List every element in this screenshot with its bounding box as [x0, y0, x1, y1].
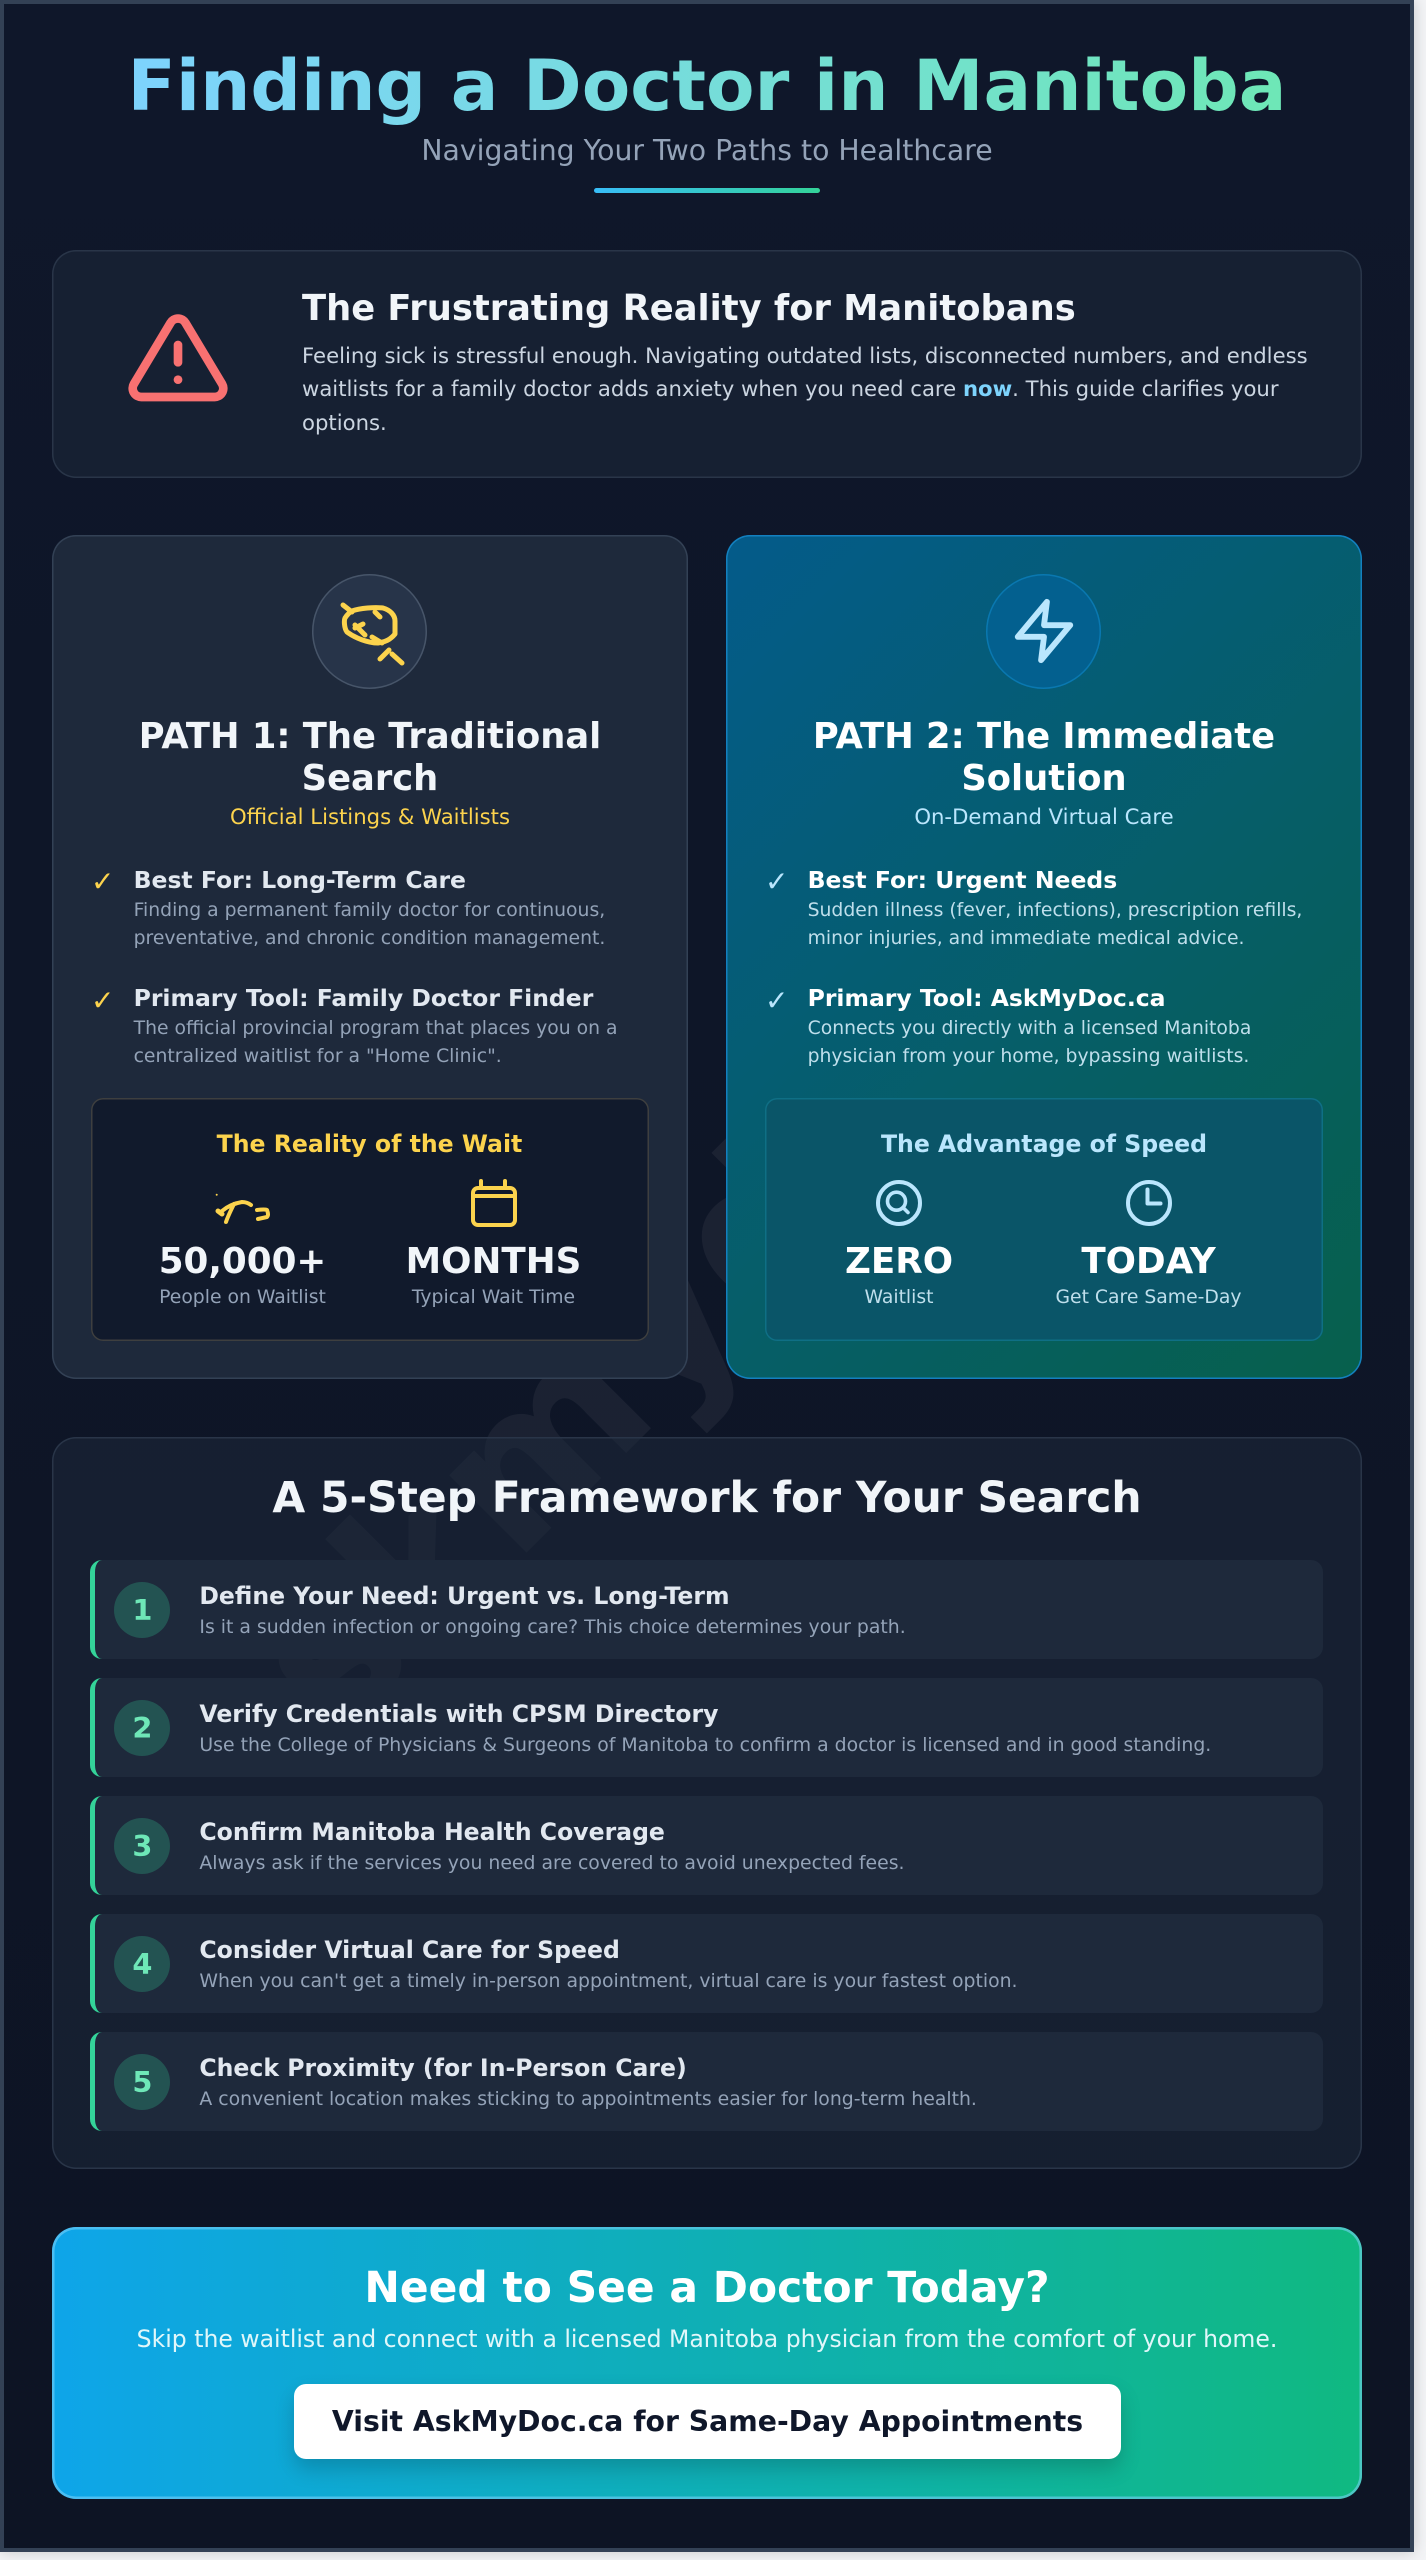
item description: Connects you directly with a licensed Manitoba [808, 1018, 1251, 1038]
cta heading: Need to See a Doctor Today? [364, 2263, 1050, 2312]
icon: check: ✓ [765, 984, 788, 1017]
header underline [594, 188, 820, 193]
item title: Best For: Urgent Needs [808, 866, 1117, 894]
step number: 2 [132, 1710, 152, 1744]
watermark: skmydoc.ca [206, 679, 1304, 1777]
callout: reality of the wait [90, 1098, 648, 1341]
list item: best for [91, 865, 605, 949]
alert text: Feeling sick is stressful enough. Navigating outdated lists, disconnected numbers, and endless [302, 343, 1308, 368]
item description: physician from your home, bypassing waitlists. [808, 1046, 1249, 1067]
icon: search circle [876, 1180, 922, 1226]
item title: Best For: Long-Term Care [134, 866, 466, 894]
icon: clock [1126, 1180, 1172, 1226]
step number: 4 [132, 1946, 152, 1980]
item description: Sudden illness (fever, infections), prescription refills, [808, 900, 1302, 921]
panel: path 1 traditional search [52, 535, 688, 1379]
stat value: TODAY [1081, 1240, 1216, 1282]
step 5 [90, 2032, 1323, 2131]
icon: check: ✓ [91, 865, 114, 898]
step 3 [90, 1796, 1323, 1895]
item description: Finding a permanent family doctor for continuous, [134, 900, 605, 921]
item title: Primary Tool: Family Doctor Finder [134, 984, 593, 1012]
cta button [294, 2384, 1121, 2459]
stat label: People on Waitlist [159, 1287, 326, 1308]
step number: 3 [132, 1828, 152, 1862]
stat value: 50,000+ [159, 1240, 326, 1282]
panel: 5-step framework [52, 1437, 1362, 2169]
stat value: ZERO [845, 1240, 953, 1282]
header [128, 44, 1286, 193]
item description [134, 900, 605, 949]
framework heading: A 5-Step Framework for Your Search [272, 1473, 1142, 1522]
subtitle: Navigating Your Two Paths to Healthcare [421, 134, 993, 166]
step description: Always ask if the services you need are covered to avoid unexpected fees. [199, 1853, 905, 1874]
icon: check: ✓ [765, 865, 788, 898]
list item: primary tool [765, 984, 1251, 1067]
item title: Primary Tool: AskMyDoc.ca [808, 984, 1166, 1012]
panel: frustrating reality [52, 250, 1362, 478]
stat: people on waitlist [159, 1194, 326, 1308]
step title: Confirm Manitoba Health Coverage [199, 1818, 665, 1846]
panel: call to action [52, 2227, 1362, 2499]
path 1 heading: PATH 1: The Traditional [139, 716, 601, 756]
alert text: options. [302, 410, 387, 435]
list item: primary tool [91, 984, 617, 1067]
step title: Define Your Need: Urgent vs. Long-Term [199, 1582, 730, 1610]
step description: Use the College of Physicians & Surgeons of Manitoba to confirm a doctor is licensed and in good standing. [199, 1735, 1211, 1756]
step description: Is it a sudden infection or ongoing care? This choice determines your path. [199, 1617, 906, 1638]
step 4 [90, 1914, 1323, 2013]
path 1 heading [139, 716, 601, 799]
cta button: Visit AskMyDoc.ca for Same-Day Appointments [332, 2405, 1083, 2438]
step title: Check Proximity (for In-Person Care) [199, 2054, 687, 2082]
stat label: Typical Wait Time [412, 1287, 575, 1308]
panel: path 2 immediate solution [726, 535, 1362, 1379]
step number [114, 1700, 170, 1756]
item description: centralized waitlist for a "Home Clinic". [134, 1046, 502, 1067]
step 1 [90, 1560, 1323, 1659]
item description: preventative, and chronic condition management. [134, 928, 605, 949]
icon: warning triangle [128, 314, 228, 402]
list item: best for [765, 865, 1302, 949]
path 2 subtitle: On-Demand Virtual Care [914, 804, 1174, 829]
stat: zero waitlist [845, 1180, 953, 1308]
step number [114, 1818, 170, 1874]
item description [134, 1018, 617, 1067]
step description: A convenient location makes sticking to appointments easier for long-term health. [199, 2089, 977, 2110]
path 2 heading: Solution [961, 758, 1127, 799]
alert text [302, 343, 1308, 435]
stat label: Waitlist [864, 1287, 934, 1308]
path 2 heading: PATH 2: The Immediate [813, 716, 1275, 756]
step title: Consider Virtual Care for Speed [199, 1936, 620, 1964]
step number [114, 1582, 170, 1638]
cta text: Skip the waitlist and connect with a licensed Manitoba physician from the comfort of your home. [137, 2325, 1277, 2353]
item description: minor injuries, and immediate medical advice. [808, 928, 1244, 949]
icon: check: ✓ [91, 984, 114, 1017]
stat label: Get Care Same-Day [1055, 1287, 1242, 1308]
callout heading: The Advantage of Speed [881, 1130, 1207, 1158]
stat: typical wait [406, 1179, 581, 1308]
callout: advantage of speed [765, 1098, 1323, 1341]
icon: broken users glyph [216, 1194, 270, 1224]
callout heading: The Reality of the Wait [217, 1130, 522, 1158]
icon: calendar [471, 1179, 517, 1227]
path 1 heading: Search [302, 758, 438, 799]
path 1 subtitle: Official Listings & Waitlists [230, 804, 510, 829]
item description: The official provincial program that places you on a [134, 1018, 617, 1038]
item description [808, 1018, 1251, 1067]
icon: path 2 circle [986, 574, 1101, 689]
title: Finding a Doctor in Manitoba [128, 44, 1286, 127]
step number: 1 [132, 1592, 152, 1626]
step number: 5 [132, 2064, 152, 2098]
alert text: waitlists for a family doctor adds anxiety when you need care now. This guide clarifies your [302, 376, 1279, 401]
icon: path 1 circle [312, 574, 427, 689]
stat value: MONTHS [406, 1240, 581, 1282]
step title: Verify Credentials with CPSM Directory [199, 1700, 718, 1728]
alert heading: The Frustrating Reality for Manitobans [302, 288, 1076, 329]
step number [114, 2054, 170, 2110]
step 2 [90, 1678, 1323, 1777]
stat: same-day care [1055, 1180, 1242, 1308]
item description [808, 900, 1302, 949]
step number [114, 1936, 170, 1992]
path 2 heading [813, 716, 1275, 799]
step description: When you can't get a timely in-person appointment, virtual care is your fastest option. [199, 1971, 1018, 1992]
